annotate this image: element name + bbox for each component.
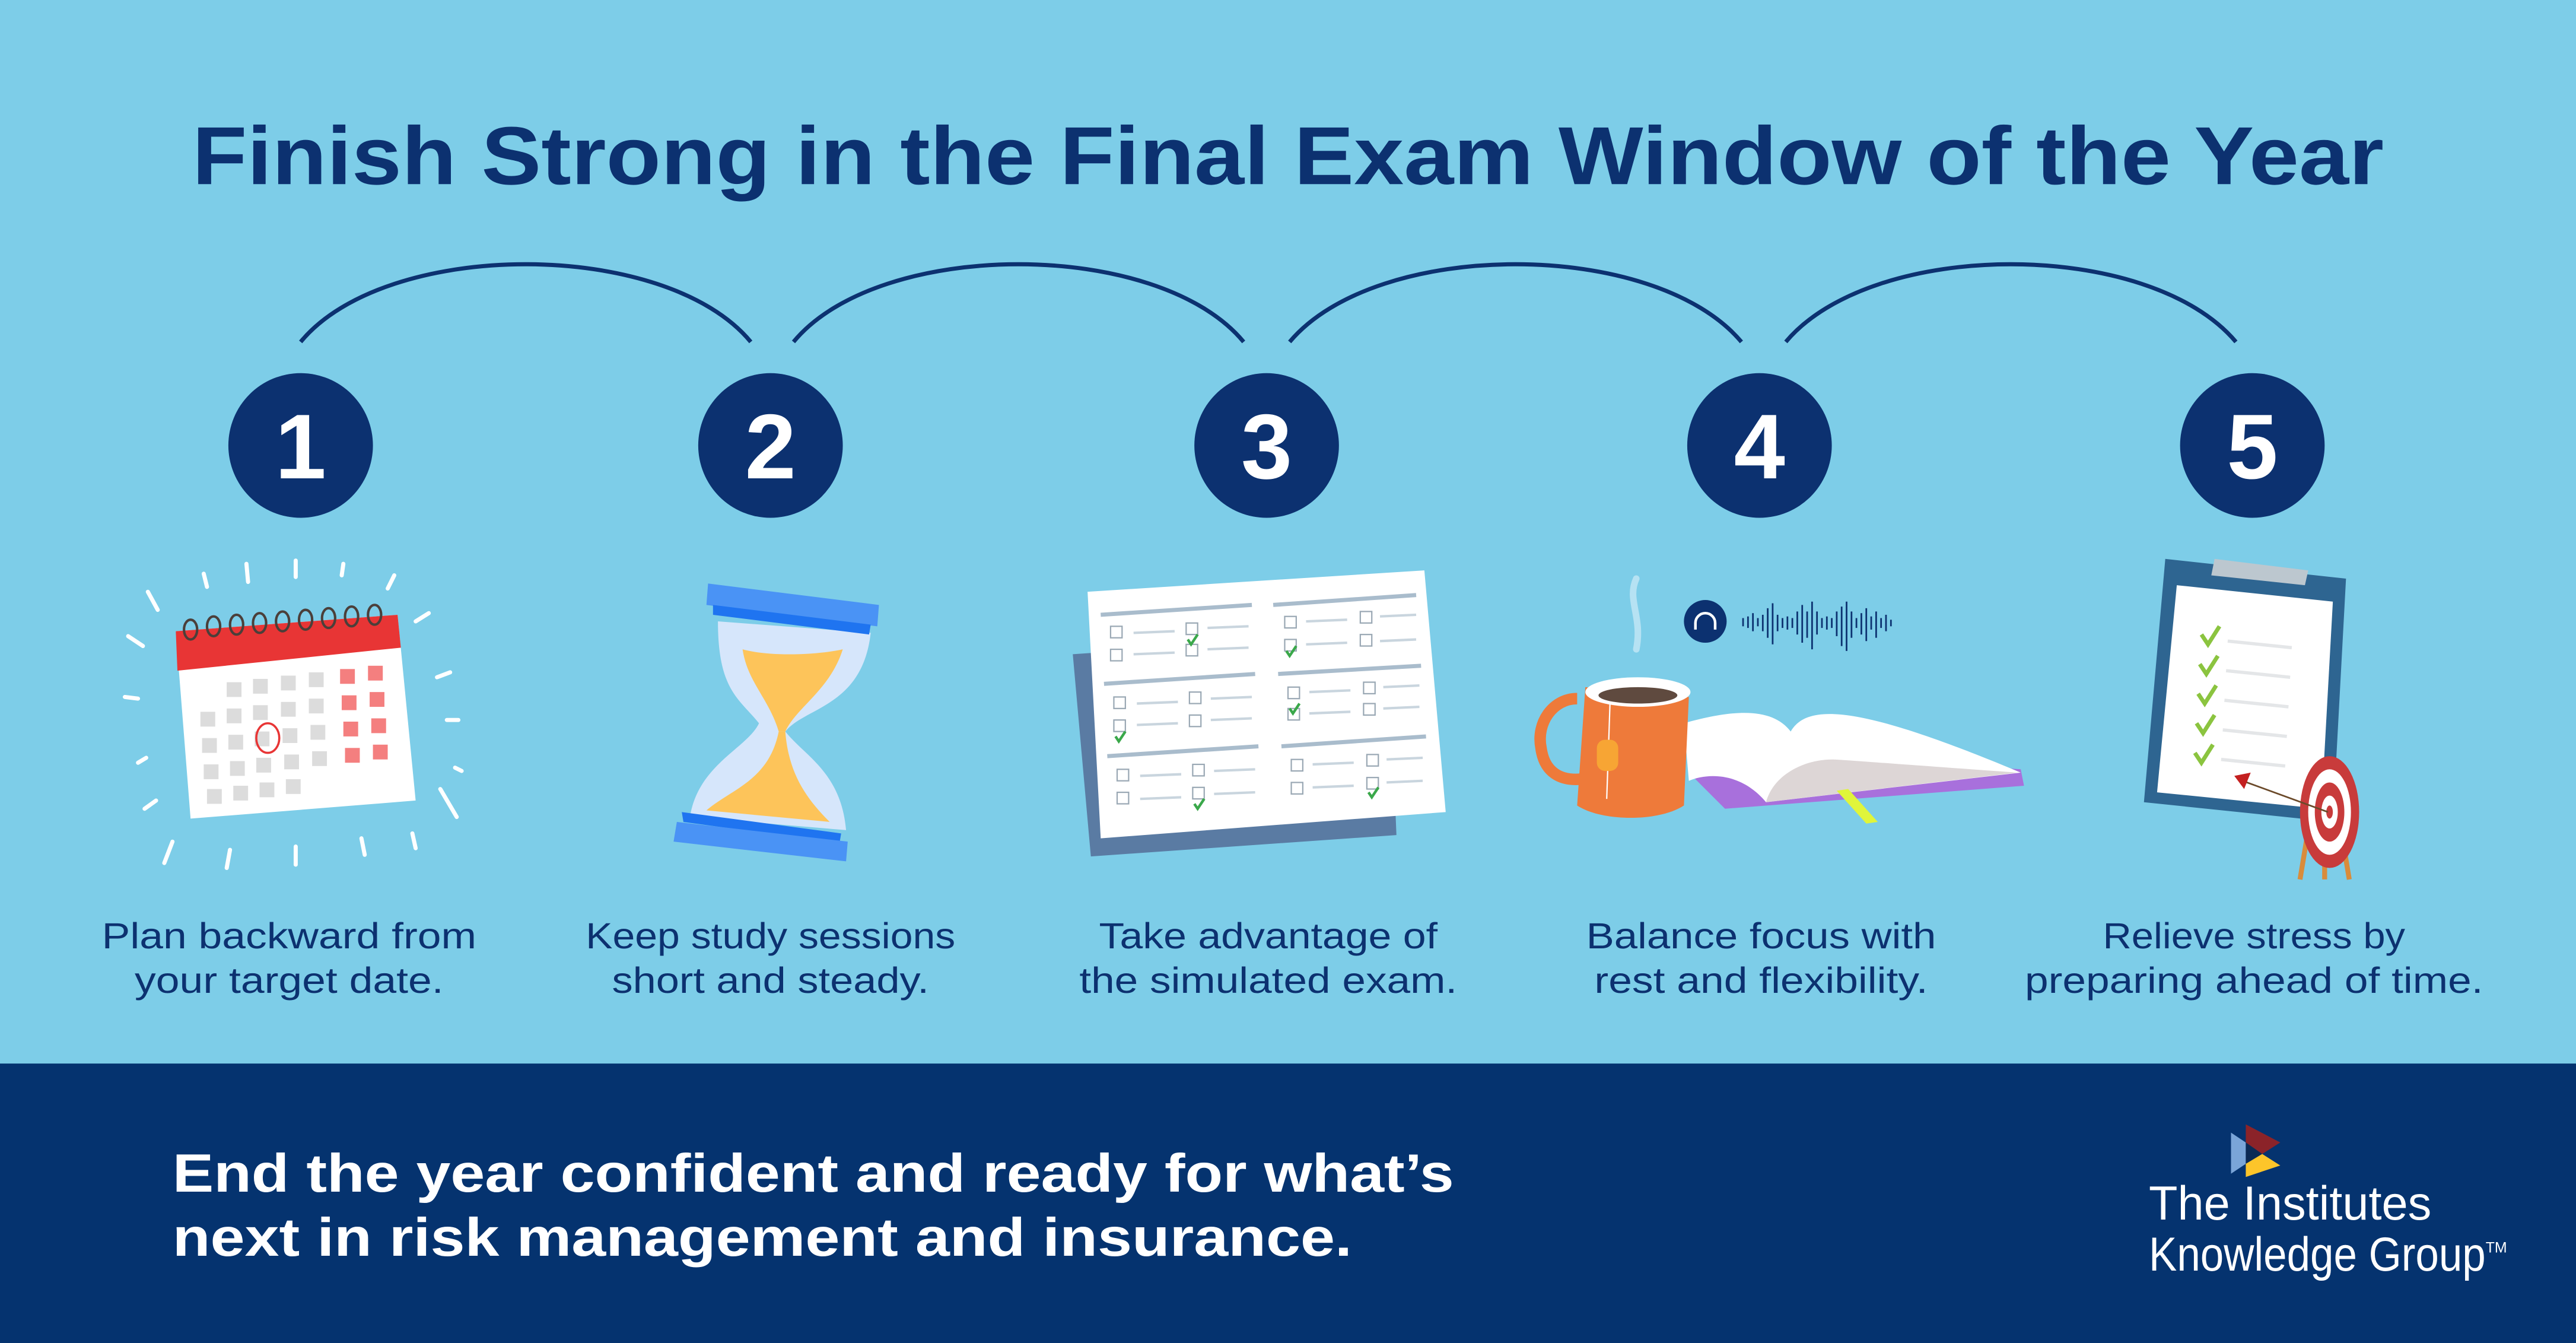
closing message — [173, 1143, 1454, 1268]
title: Finish Strong in the Final Exam Window of the Year — [192, 110, 2384, 202]
captions: short and steady. — [612, 960, 929, 1001]
step numbers: 2 — [745, 395, 796, 498]
icon: hourglass — [673, 583, 879, 861]
captions: Balance focus with — [1586, 916, 1936, 956]
captions: Relieve stress by — [2103, 916, 2406, 956]
icon: clipboard and target — [2144, 559, 2359, 880]
icon: mug with book and audio — [1540, 579, 2024, 824]
logo: The Institutes — [2149, 1177, 2431, 1230]
step numbers: 5 — [2227, 395, 2278, 498]
step numbers: 3 — [1241, 395, 1292, 498]
step numbers: 4 — [1734, 395, 1785, 498]
captions: the simulated exam. — [1079, 960, 1457, 1001]
icon: simulated exam on tablet — [1073, 570, 1446, 856]
closing message: End the year confident and ready for what’s — [173, 1143, 1454, 1204]
logo: Knowledge Group — [2149, 1228, 2486, 1281]
step numbers: 1 — [275, 395, 326, 498]
logo — [2149, 1125, 2507, 1281]
captions: rest and flexibility. — [1594, 960, 1928, 1001]
captions: Take advantage of — [1099, 916, 1438, 956]
icon: calendar — [125, 561, 462, 868]
captions: your target date. — [135, 960, 444, 1001]
captions: preparing ahead of time. — [2025, 960, 2483, 1001]
captions: Keep study sessions — [586, 916, 955, 956]
connector arcs — [301, 264, 2236, 342]
captions: Plan backward from — [102, 916, 476, 956]
footer band — [0, 1063, 2576, 1343]
step numbers — [228, 373, 2324, 518]
captions — [102, 916, 2483, 1001]
closing message: next in risk management and insurance. — [173, 1207, 1352, 1268]
logo: TM — [2486, 1240, 2507, 1256]
